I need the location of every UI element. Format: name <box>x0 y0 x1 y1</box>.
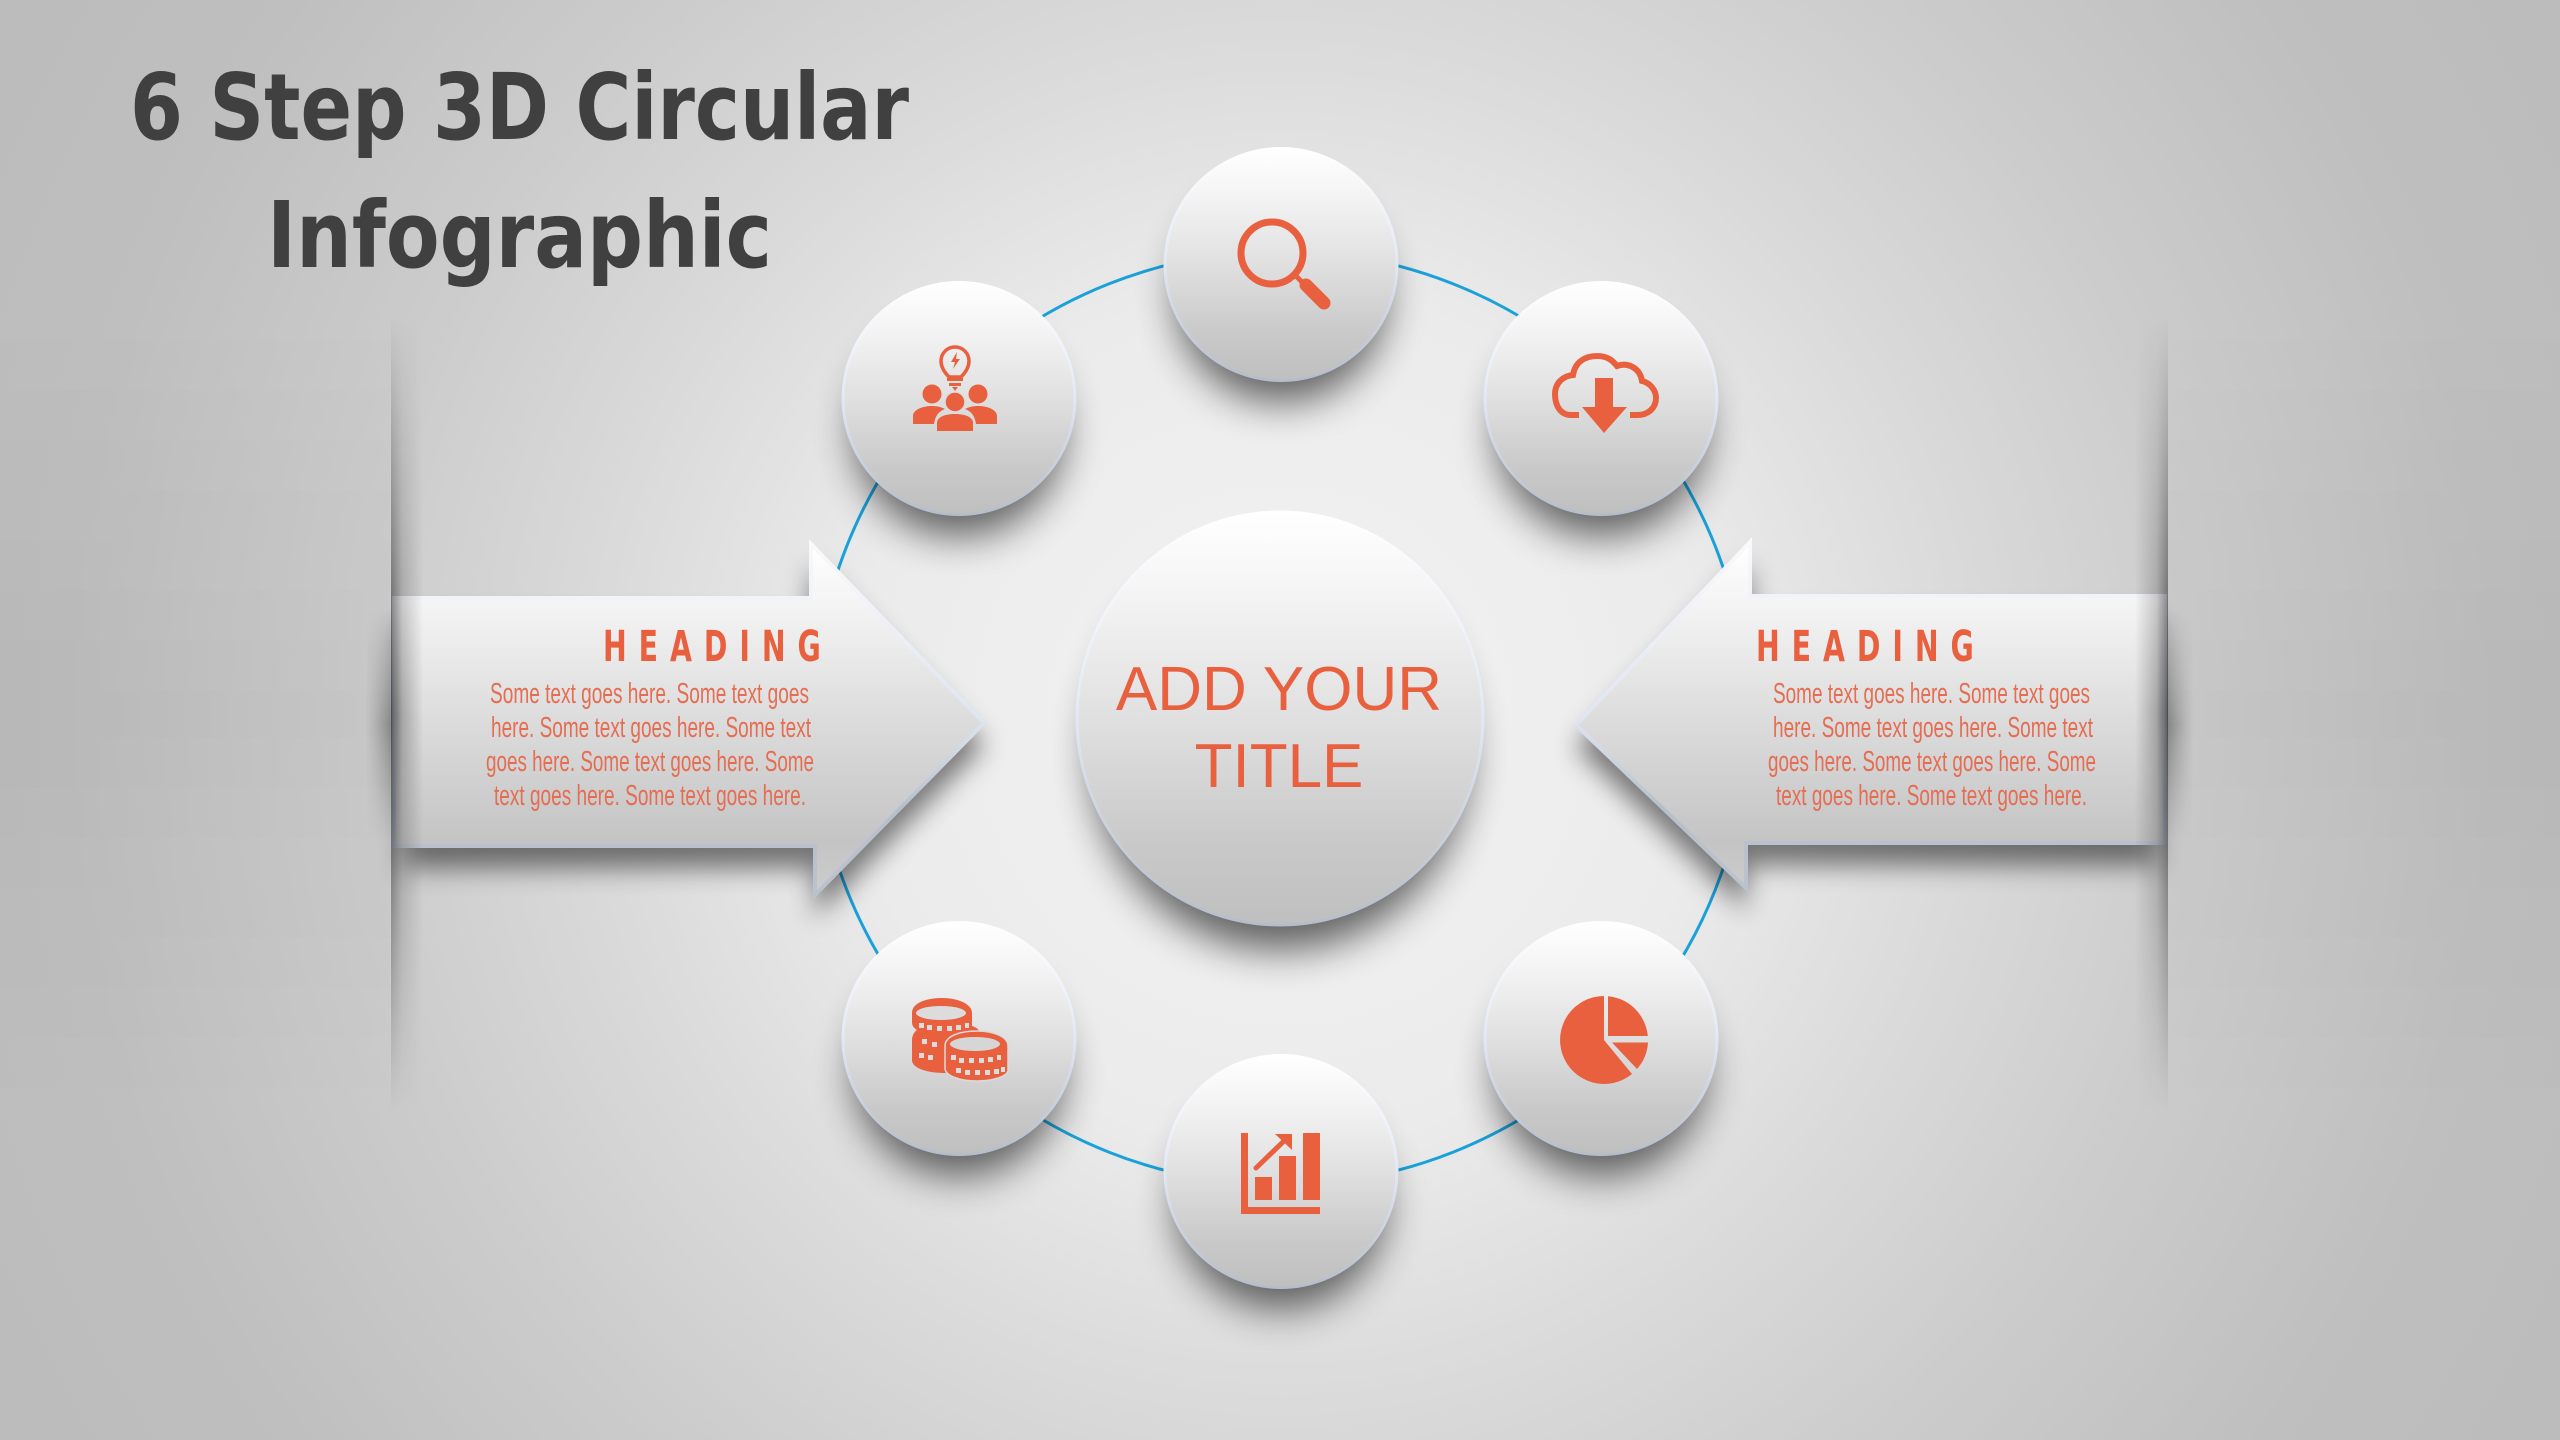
text block: left: text goes here. Some text goes here. <box>494 780 806 812</box>
icon: pie chart <box>1560 996 1648 1084</box>
icon: coins <box>912 998 1008 1081</box>
text block: right: goes here. Some text goes here. Some <box>1768 746 2096 778</box>
text block: right: here. Some text goes here. Some text <box>1773 712 2093 744</box>
node: upper right cloud <box>1485 282 1717 536</box>
centre title text: ADD YOUR <box>1116 655 1442 724</box>
arrow: left panel <box>394 544 984 917</box>
node: lower left coins <box>843 922 1075 1176</box>
text block: left <box>486 678 814 812</box>
text block: left: here. Some text goes here. Some text <box>491 712 811 744</box>
node: lower right pie <box>1485 922 1717 1176</box>
centre circle <box>1077 512 1483 950</box>
wall shadow: left <box>370 344 420 1084</box>
icon: team with light bulb <box>913 347 997 431</box>
node: upper left team idea <box>843 282 1075 536</box>
side wall shading: right <box>2168 300 2560 1130</box>
heading: left: HEADING <box>603 621 821 672</box>
text block: right <box>1768 678 2096 812</box>
node: bottom growth chart <box>1165 1056 1397 1309</box>
node: top search <box>1165 148 1397 402</box>
icon: magnifier <box>1241 222 1324 303</box>
text block: left: goes here. Some text goes here. Some <box>486 746 814 778</box>
title <box>130 54 910 289</box>
wall shadow: right <box>2138 344 2190 1084</box>
text block: right: Some text goes here. Some text goes <box>1773 678 2090 710</box>
icon: bar chart with arrow <box>1241 1133 1320 1214</box>
centre title text: TITLE <box>1195 732 1363 801</box>
centre title text <box>1116 655 1442 801</box>
text block: left: Some text goes here. Some text goes <box>490 678 809 710</box>
title: 6 Step 3D Circular <box>130 54 910 161</box>
title: Infographic <box>267 182 772 289</box>
icon: cloud download <box>1555 356 1656 433</box>
arrow: right panel <box>1576 542 2165 910</box>
side wall shading: left <box>0 300 390 1130</box>
text block: right: text goes here. Some text goes here. <box>1776 780 2087 812</box>
heading: right: HEADING <box>1756 621 1974 672</box>
ring connector <box>814 251 1748 1185</box>
